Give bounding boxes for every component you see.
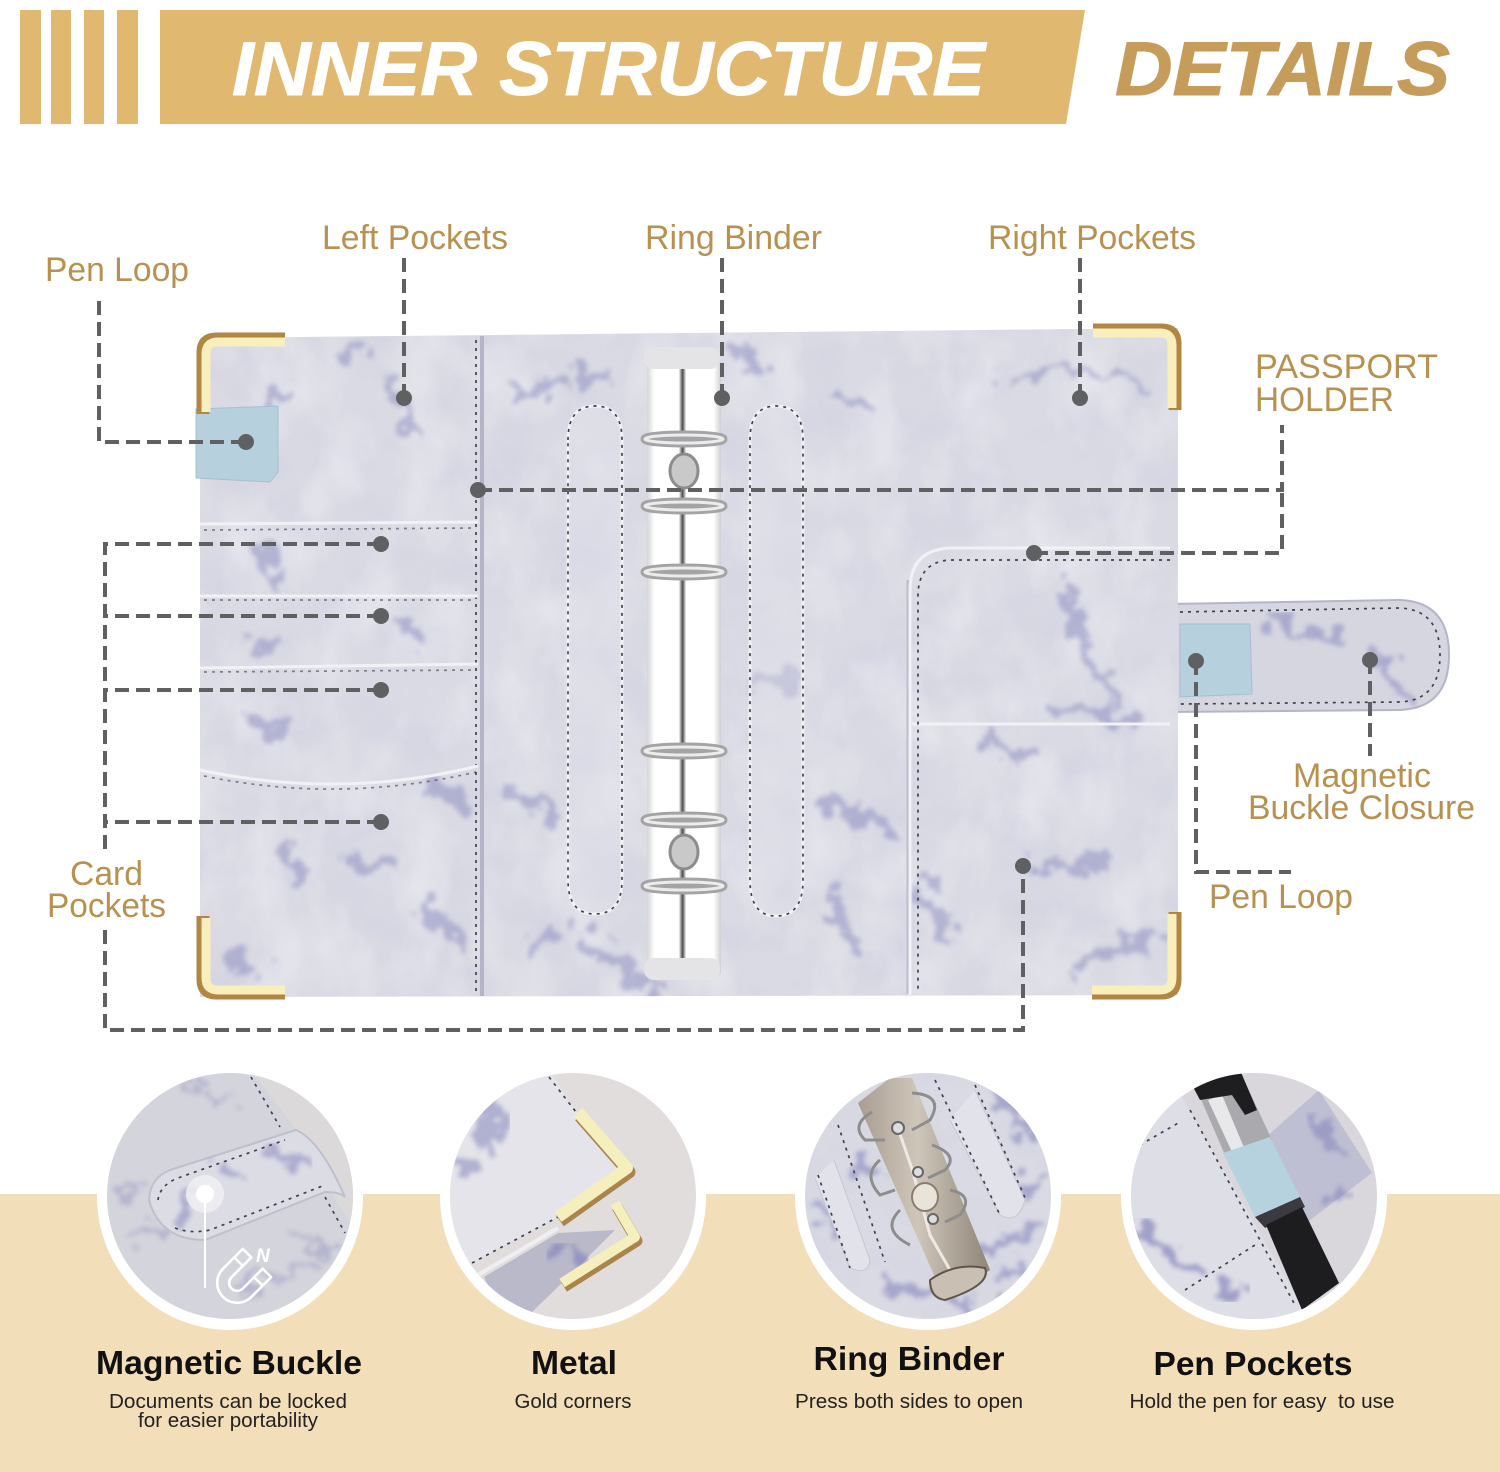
gold corners <box>203 330 1175 993</box>
detail circle: magnetic buckle <box>97 1064 363 1330</box>
caption: magnetic buckle: for easier portability <box>138 1409 319 1432</box>
spine lines <box>480 336 484 996</box>
caption: pen pockets <box>1130 1345 1394 1413</box>
icon: magnet <box>209 1246 271 1311</box>
callout labels: Pen Loop <box>45 251 189 289</box>
passport pocket <box>910 548 1170 995</box>
callout labels: Card <box>70 855 143 893</box>
caption: magnetic buckle: Documents can be locked <box>109 1390 347 1413</box>
background band <box>0 1194 1500 1472</box>
cover <box>200 328 1178 997</box>
caption: pen pockets: Pen Pockets <box>1154 1345 1352 1382</box>
caption: metal: Metal <box>531 1344 617 1381</box>
callout lines <box>99 258 1378 1030</box>
ring mechanism <box>644 347 723 980</box>
caption: ring binder: Press both sides to open <box>795 1390 1023 1413</box>
callout labels: Ring Binder <box>645 219 822 257</box>
pen loop right <box>1180 624 1252 697</box>
strap <box>1170 600 1449 712</box>
detail circle: ring binder <box>795 1064 1061 1330</box>
callout labels: Right Pockets <box>988 219 1196 257</box>
header stripes <box>20 10 138 124</box>
caption: pen pockets: Hold the pen for easy to use <box>1130 1390 1394 1413</box>
binder illustration <box>196 328 1449 998</box>
caption: ring binder <box>795 1340 1023 1413</box>
stitched strap slots <box>568 406 622 914</box>
marble texture <box>200 328 1180 998</box>
marble veins <box>230 345 1150 985</box>
caption: magnetic buckle: Magnetic Buckle <box>96 1344 362 1381</box>
icon: magnet: N <box>256 1246 271 1267</box>
callout labels: HOLDER <box>1255 381 1394 419</box>
callout labels: PASSPORT <box>1255 348 1438 386</box>
caption: ring binder: Ring Binder <box>814 1340 1005 1377</box>
title banner <box>160 10 1085 124</box>
pen loop left <box>196 406 278 482</box>
callout labels: Buckle Closure <box>1248 789 1475 827</box>
detail circle: metal <box>440 1064 710 1330</box>
callout labels: Magnetic <box>1293 757 1431 795</box>
callout labels <box>45 219 1475 925</box>
title: details: DETAILS <box>1115 27 1450 112</box>
caption: magnetic buckle <box>96 1344 362 1432</box>
caption: metal: Gold corners <box>514 1390 632 1413</box>
left pockets <box>200 522 478 784</box>
callout labels: Pockets <box>47 887 166 925</box>
title banner: INNER STRUCTURE <box>232 27 987 112</box>
caption: metal <box>514 1344 632 1413</box>
callout labels: Pen Loop <box>1209 878 1353 916</box>
callout labels: Left Pockets <box>322 219 508 257</box>
detail circle: pen pockets <box>1120 1064 1390 1330</box>
